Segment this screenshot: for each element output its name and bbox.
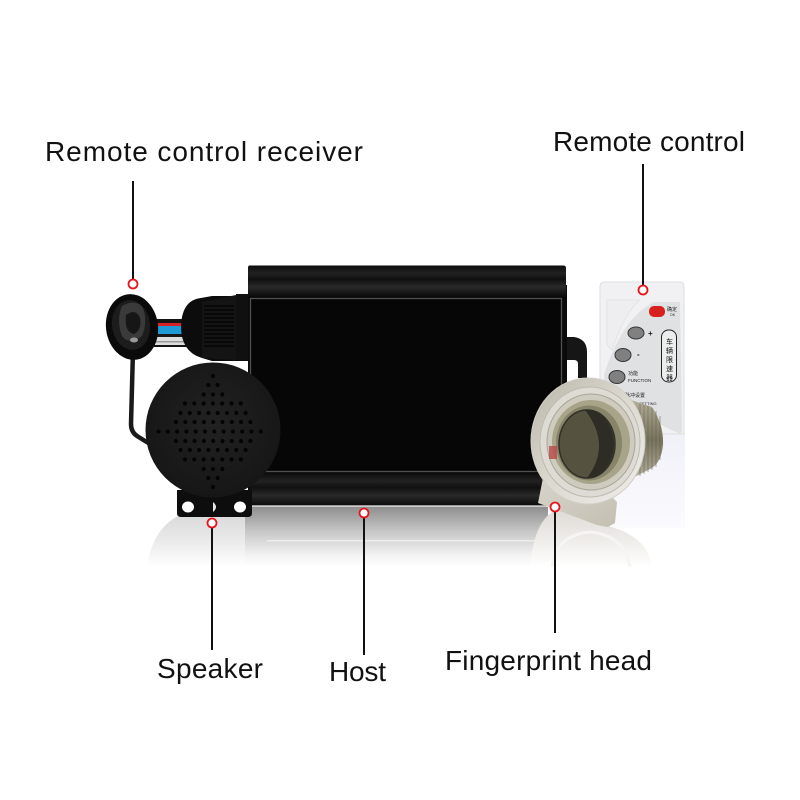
floor reflection [147,433,685,567]
red marks [549,446,557,459]
remote labels: OK [670,313,676,317]
label: remote control: Remote control [553,126,745,157]
speed limiter badge: 限 [666,355,673,364]
remote labels: 确定 [667,306,677,313]
front panel [250,298,562,472]
label: remote control [553,126,745,294]
minus button [615,348,631,362]
remote labels: 脉冲设置 [625,392,645,399]
mounting tab right [566,337,587,378]
host body [248,285,567,506]
speaker [146,362,280,498]
remote labels: - [637,350,640,359]
OK button [649,306,665,317]
clear outer ring [531,378,645,504]
fingerprint head [531,378,663,527]
threaded barrel [625,398,663,482]
speed limiter badge: 车 [666,337,673,346]
fingerprint reflection [530,510,652,567]
host unit [248,266,587,506]
clear tab [538,478,617,527]
label: host: Host [329,656,386,687]
speed limiter badge: 辆 [666,346,673,355]
speed limiter badge: 器 [666,374,673,382]
remote labels [625,306,677,406]
remote labels: + [648,329,653,338]
wires [154,319,186,347]
bottom rail [250,473,550,505]
speaker grille [158,376,268,487]
remote labels: PULSE SETTING [625,401,657,406]
metal bezel [552,400,630,484]
top rail [248,266,566,296]
remote labels: FUNCTION [628,378,651,383]
label: host [329,508,386,687]
upper left inset [607,300,640,350]
sensor lens [559,410,615,478]
label: fingerprint head [445,502,652,676]
label: remote control receiver [45,136,363,288]
cable gland [181,294,248,361]
speed limiter badge [662,330,676,382]
button panel [604,302,682,434]
plus button [628,327,644,339]
bracket with holes [177,490,252,517]
label: remote control receiver: Remote control receiver [45,136,363,167]
remote reflection panel [612,433,685,528]
remote control receiver [102,291,162,363]
remote control device [600,282,684,434]
remote labels: 功能 [628,370,638,377]
label: fingerprint head: Fingerprint head [445,645,652,676]
speaker cable [131,350,150,444]
label: speaker [157,518,263,684]
host reflection [245,507,548,567]
function button [609,370,625,384]
label: speaker: Speaker [157,653,263,684]
speaker dome reflection [147,507,262,567]
speed limiter badge: 速 [666,365,673,373]
